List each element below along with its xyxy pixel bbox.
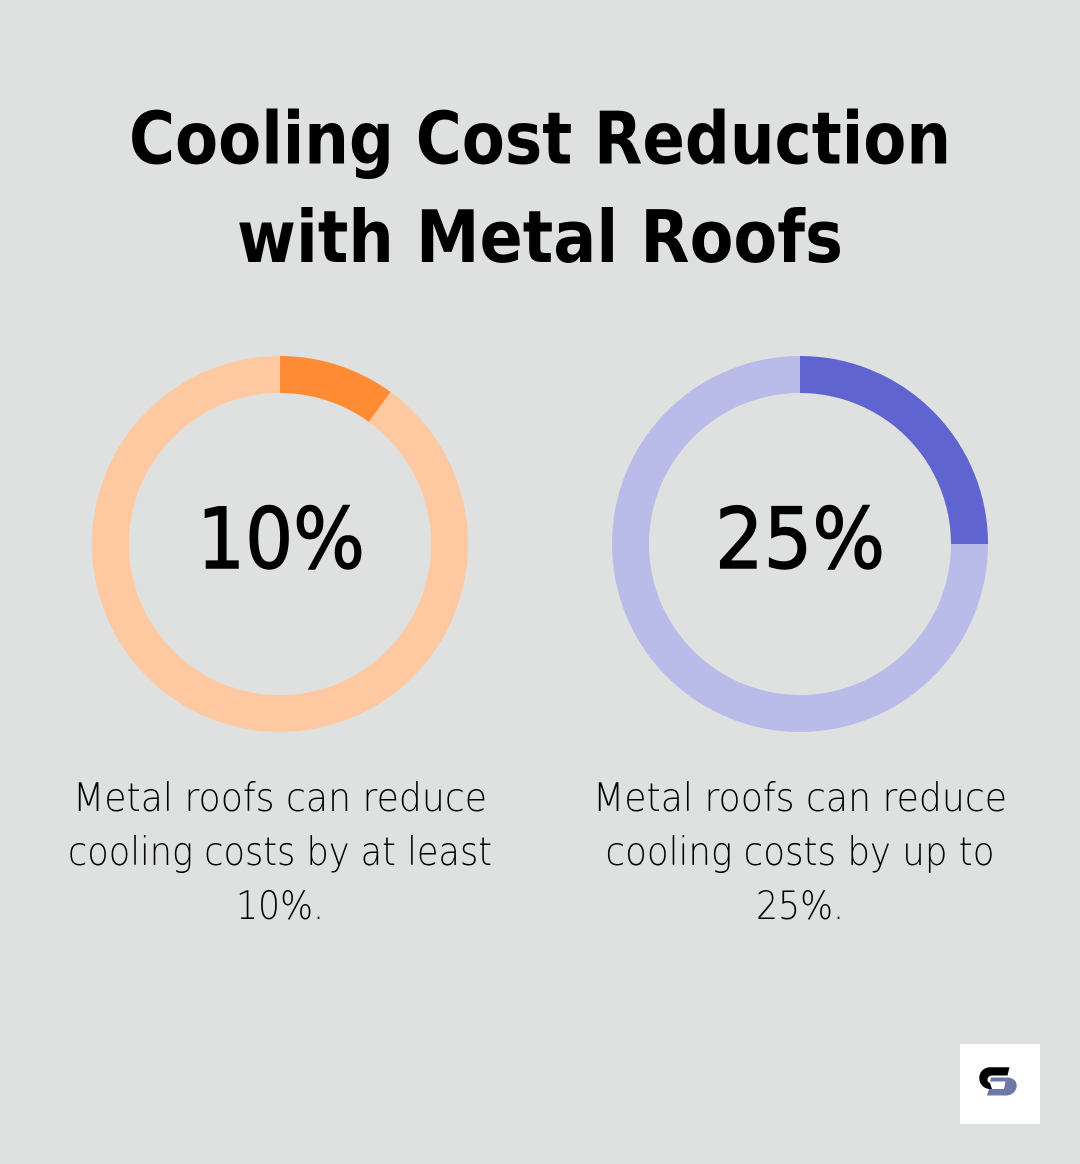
title [129,96,951,279]
description: 10%: 10%. [236,884,324,929]
donut chart: 25% [630,374,970,714]
logo [960,1044,1040,1124]
title: Cooling Cost Reduction [129,96,951,180]
panel: 25% statistic [593,374,1007,929]
panel: 10% statistic [68,374,492,929]
description: 25%: cooling costs by up to [606,830,994,875]
value: 10%: 10% [197,490,365,588]
donut chart: 10% [110,374,450,714]
description: 25%: Metal roofs can reduce [593,776,1007,821]
title: with Metal Roofs [237,195,843,279]
value: 25%: 25% [715,490,885,588]
description: 25% [593,776,1007,929]
description: 10%: cooling costs by at least [68,830,492,875]
description: 10% [68,776,492,929]
description: 25%: 25%. [756,884,844,929]
description: 10%: Metal roofs can reduce [73,776,487,821]
